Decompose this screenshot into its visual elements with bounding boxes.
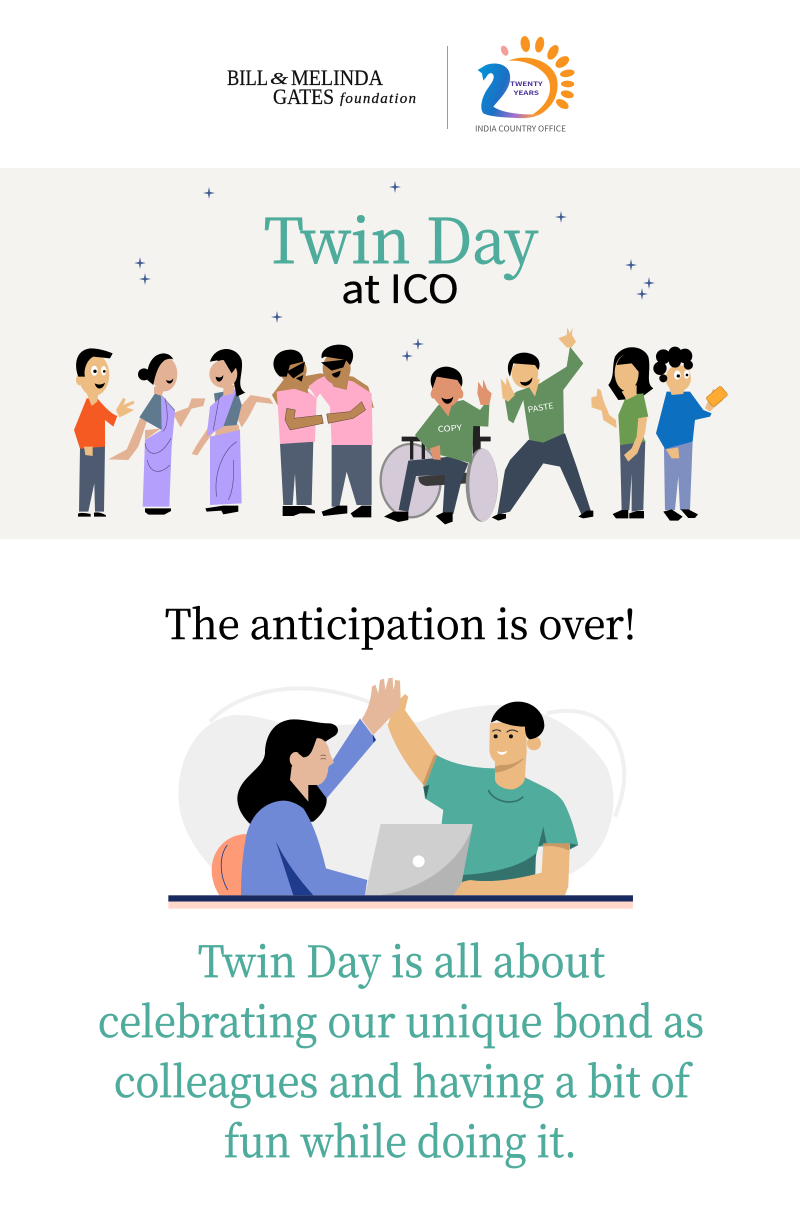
laptop	[365, 824, 473, 895]
illustration: colleagues left group	[74, 345, 374, 517]
woman with raised arm	[237, 678, 401, 895]
figure: woman in purple sari facing left	[192, 349, 273, 514]
panel: banner	[0, 168, 800, 539]
figure: man in orange shirt	[74, 348, 135, 517]
title: Twin Day	[264, 192, 539, 281]
figure: twins in pink shirts	[272, 345, 374, 517]
text block: twin day description: Twin Day is all about	[198, 929, 605, 990]
text block: twin day description: celebrating our unique bond as	[98, 989, 704, 1050]
logo text: twenty years	[510, 79, 543, 97]
logo caption: INDIA COUNTRY OFFICE	[475, 123, 566, 134]
text block: twin day description	[98, 929, 704, 1170]
figure: woman in green shirt with thumbs up	[591, 347, 653, 518]
illustration: high five at desk	[168, 678, 633, 909]
figure: man in wheelchair with COPY shirt	[381, 367, 498, 524]
text block: twin day description: fun while doing it.	[224, 1109, 577, 1170]
decorative stars	[134, 181, 655, 362]
logo peacock numeral two	[478, 63, 547, 118]
logo: Bill & Melinda Gates foundation: &	[270, 69, 289, 88]
man with raised arm	[388, 680, 578, 895]
logo: Bill & Melinda Gates foundation: GATES	[273, 84, 334, 109]
illustration: colleagues right group	[381, 327, 728, 524]
logo text: twenty years: YEARS	[512, 88, 539, 97]
subtitle: at ICO	[341, 259, 459, 315]
background outlines	[210, 688, 624, 817]
logo: Bill & Melinda Gates foundation	[227, 65, 416, 109]
chair	[212, 834, 247, 895]
figure: woman in purple sari facing right	[108, 353, 205, 515]
logo: Bill & Melinda Gates foundation: MELINDA	[291, 65, 383, 90]
logo ring	[508, 58, 558, 117]
shirt label: COPY: COPY	[437, 422, 463, 435]
logo text: twenty years: TWENTY	[510, 79, 543, 88]
text block: twin day description: colleagues and having a bit of	[114, 1049, 693, 1110]
logo: Bill & Melinda Gates foundation: foundation	[340, 91, 416, 107]
logo sun petals	[499, 35, 575, 111]
figure: dancing man with PASTE shirt	[492, 327, 593, 521]
desk	[168, 895, 633, 909]
shirt label: PASTE: PASTE	[527, 400, 555, 416]
logo: Bill & Melinda Gates foundation: BILL	[227, 65, 268, 90]
divider between logos	[447, 46, 448, 129]
background blob	[178, 705, 613, 887]
heading: the anticipation is over: The anticipation is over!	[165, 592, 636, 651]
figure: boy in blue shirt with phone	[653, 347, 728, 521]
logo: twenty years India country office	[475, 35, 575, 134]
